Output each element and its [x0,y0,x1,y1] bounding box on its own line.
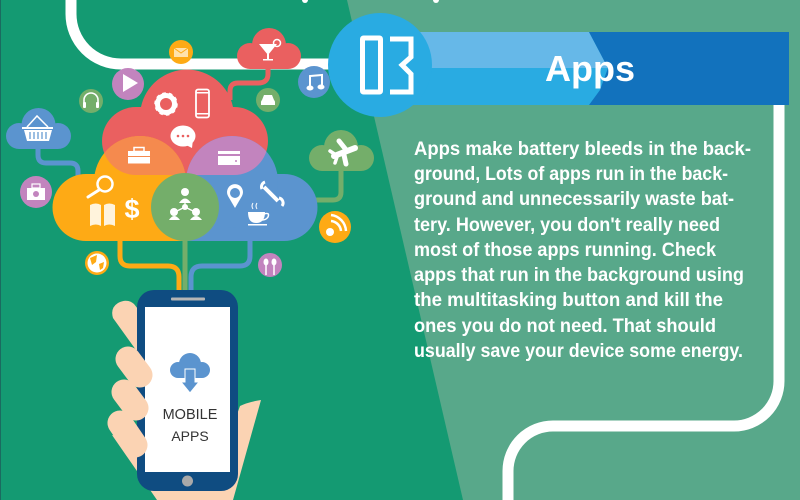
cloud: orange [52,136,190,241]
icon: mail circle [169,40,193,64]
phone label second line: APPS [171,428,209,444]
icon: open book [90,204,115,226]
centre green circle [151,173,219,241]
small cloud: plane [309,130,374,171]
icon: cocktail glass [259,40,280,60]
body text [414,139,751,362]
cloud overlap: coral [104,136,185,175]
cloud: red [102,70,268,175]
icon: wrench [261,182,283,206]
icon: car circle [256,88,280,112]
icon: dollar sign: $ [124,194,140,224]
header band: bright blue [400,32,610,105]
cloud overlap: purple [186,136,266,175]
phone speaker [171,298,205,300]
hand: palm behind phone [112,400,261,500]
icon: headphones circle [79,89,103,113]
icon: briefcase [128,148,150,164]
icon: cutlery circle [258,253,282,277]
icon: chat bubble [170,126,196,148]
main cloud group [52,70,318,241]
body text: ones you do not need. That should [414,316,716,337]
icon: credit card [218,151,240,165]
panel: light green slanted background [347,0,800,500]
cloud: blue [186,136,318,241]
body text: tery. However, you don't really need [414,215,720,236]
connector: white bottom route [508,105,779,500]
phone screen [145,307,230,472]
small cloud: basket [6,108,71,149]
icon: map pin [227,184,243,208]
body text: apps that run in the background using [414,265,744,286]
small cloud: cocktail [237,28,301,69]
icon: download cloud [170,353,210,393]
icon: shopping basket [22,116,53,141]
icon: camera circle [20,176,52,208]
body text: ground, Lots of apps run in the back- [414,164,728,185]
connectors: coloured lines [38,66,341,292]
body text: usually save your device some energy. [414,341,743,362]
hand and phone illustration [112,290,261,500]
connector: white top route [71,0,340,64]
body text: the multitasking button and kill the [414,290,723,311]
body text: ground and unnecessarily waste bat- [414,189,734,210]
body text: Apps make battery bleeds in the back- [414,139,751,160]
header band: light blue [400,32,608,68]
phone body [137,290,238,491]
number 03 [362,38,411,92]
phone label: MOBILE [163,407,218,423]
icon: music circle [298,66,330,98]
text remnants from previous section [302,0,439,3]
number circle [328,13,432,117]
section header [328,13,789,117]
header band: dark blue [589,32,789,105]
hand: fingers [120,359,140,445]
hand: top finger behind phone [112,301,145,350]
icon: airplane [330,141,355,164]
icon: smartphone [196,90,209,118]
icon: coffee cup [248,203,268,226]
icon: people network [169,188,202,220]
heading: Apps [545,48,635,89]
icon: play circle [112,68,144,100]
body text: most of those apps running. Check [414,240,716,261]
icon: rss circle [319,211,351,243]
phone home button [182,476,193,486]
icon: gear [156,94,176,114]
left edge strip [0,0,1,500]
icon: magnifier [88,176,112,197]
icon: globe circle [85,251,109,275]
